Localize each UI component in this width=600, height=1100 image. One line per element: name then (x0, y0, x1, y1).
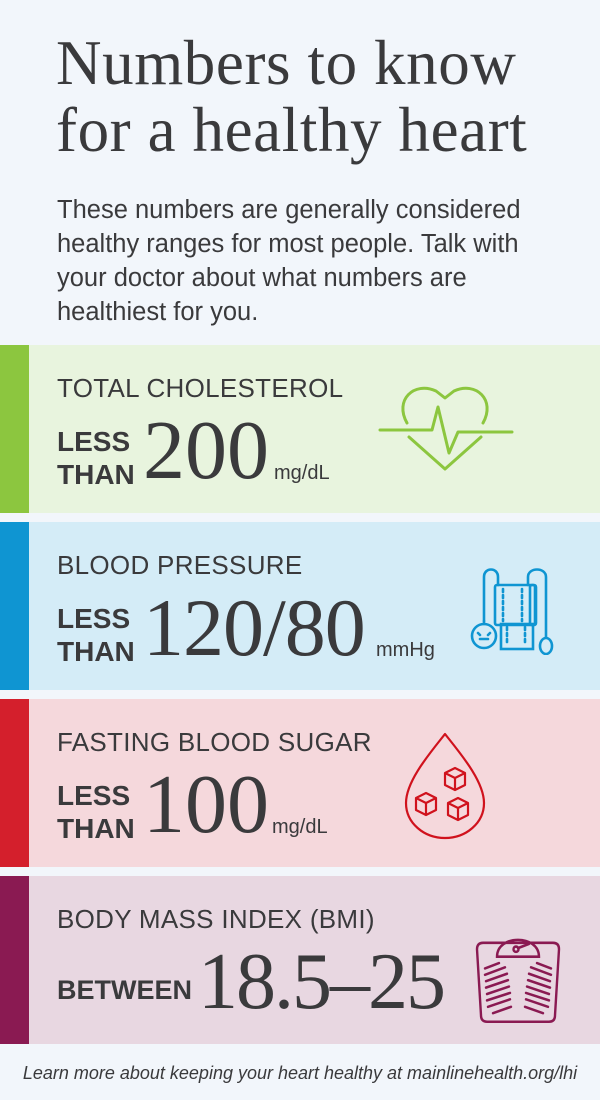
intro text: your doctor about what numbers are (57, 264, 467, 292)
label: less than: LESS (57, 780, 130, 811)
icon: blood pressure monitor (470, 568, 554, 655)
title: Numbers to know (56, 28, 516, 98)
panel: blood pressure (0, 522, 600, 690)
intro text: These numbers are generally considered (57, 196, 521, 224)
unit: mmHg (376, 639, 435, 661)
label: between: BETWEEN (57, 975, 192, 1005)
heading: blood pressure: BLOOD PRESSURE (57, 550, 302, 580)
title: for a healthy heart (56, 95, 527, 165)
value: 18.5–25: 18.5–25 (198, 938, 444, 1026)
intro text (57, 196, 521, 326)
label: less than: THAN (57, 636, 135, 667)
panel: fasting blood sugar (0, 699, 600, 867)
label: less than (57, 603, 135, 667)
unit: mg/dL (274, 462, 330, 484)
label: less than: THAN (57, 459, 135, 490)
value: 200: 200 (143, 404, 269, 497)
label: less than: LESS (57, 603, 130, 634)
heading: fasting blood sugar: FASTING BLOOD SUGAR (57, 727, 372, 757)
label: less than (57, 780, 135, 844)
panel: body mass index (0, 876, 600, 1044)
label: less than: THAN (57, 813, 135, 844)
intro text: healthy ranges for most people. Talk with (57, 230, 519, 258)
unit: mg/dL (272, 816, 328, 838)
icon: scale (476, 938, 560, 1023)
value: 120/80: 120/80 (143, 582, 365, 673)
title (56, 28, 527, 165)
heading: body mass index: BODY MASS INDEX (BMI) (57, 904, 375, 934)
icon: heart with pulse (378, 386, 514, 471)
footer: Learn more about keeping your heart healthy at mainlinehealth.org/lhi (23, 1063, 577, 1083)
panel: total cholesterol (0, 345, 600, 513)
icon: blood drop with sugar cubes (404, 732, 486, 840)
label: less than: LESS (57, 426, 130, 457)
intro text: healthiest for you. (57, 298, 258, 326)
label: less than (57, 426, 135, 490)
heading: total cholesterol: TOTAL CHOLESTEROL (57, 373, 343, 403)
value: 100: 100 (143, 758, 269, 851)
